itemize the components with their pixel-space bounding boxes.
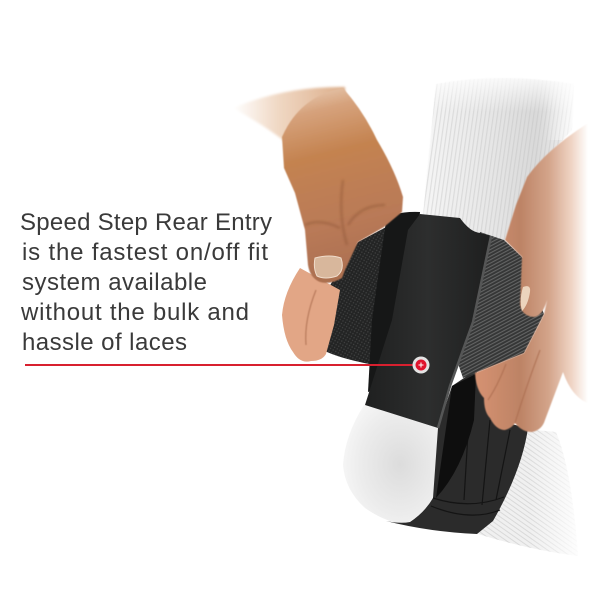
right hand: thumbnail xyxy=(521,286,530,311)
right twill flap xyxy=(450,232,544,378)
callout text: system available xyxy=(22,269,207,296)
callout text: Speed Step Rear Entry xyxy=(20,209,272,236)
left hand: knuckle shading xyxy=(305,180,385,245)
red leader line xyxy=(25,364,417,366)
right hand: palm, thumb and fingers xyxy=(475,122,590,432)
upper calf sock xyxy=(420,70,595,240)
left textured flap xyxy=(309,226,400,366)
left hand: thumbnail xyxy=(314,256,342,278)
central black panel xyxy=(365,214,491,428)
hotspot marker xyxy=(412,356,430,374)
callout text: without the bulk and xyxy=(20,299,249,326)
left hand: back of hand xyxy=(282,88,403,283)
callout text: hassle of laces xyxy=(22,329,187,356)
left hand xyxy=(233,87,403,362)
heel sock xyxy=(343,405,438,524)
rear strap xyxy=(386,370,528,534)
right hand: finger gaps xyxy=(488,350,540,423)
left hand: wrist fading in xyxy=(233,87,345,145)
right hand xyxy=(475,122,590,432)
brace back shell xyxy=(368,212,420,392)
left hand: lower fingers xyxy=(282,268,340,362)
foot sock xyxy=(478,425,585,560)
left hand: finger gap xyxy=(306,290,316,345)
callout text: is the fastest on/off fit xyxy=(22,239,268,266)
